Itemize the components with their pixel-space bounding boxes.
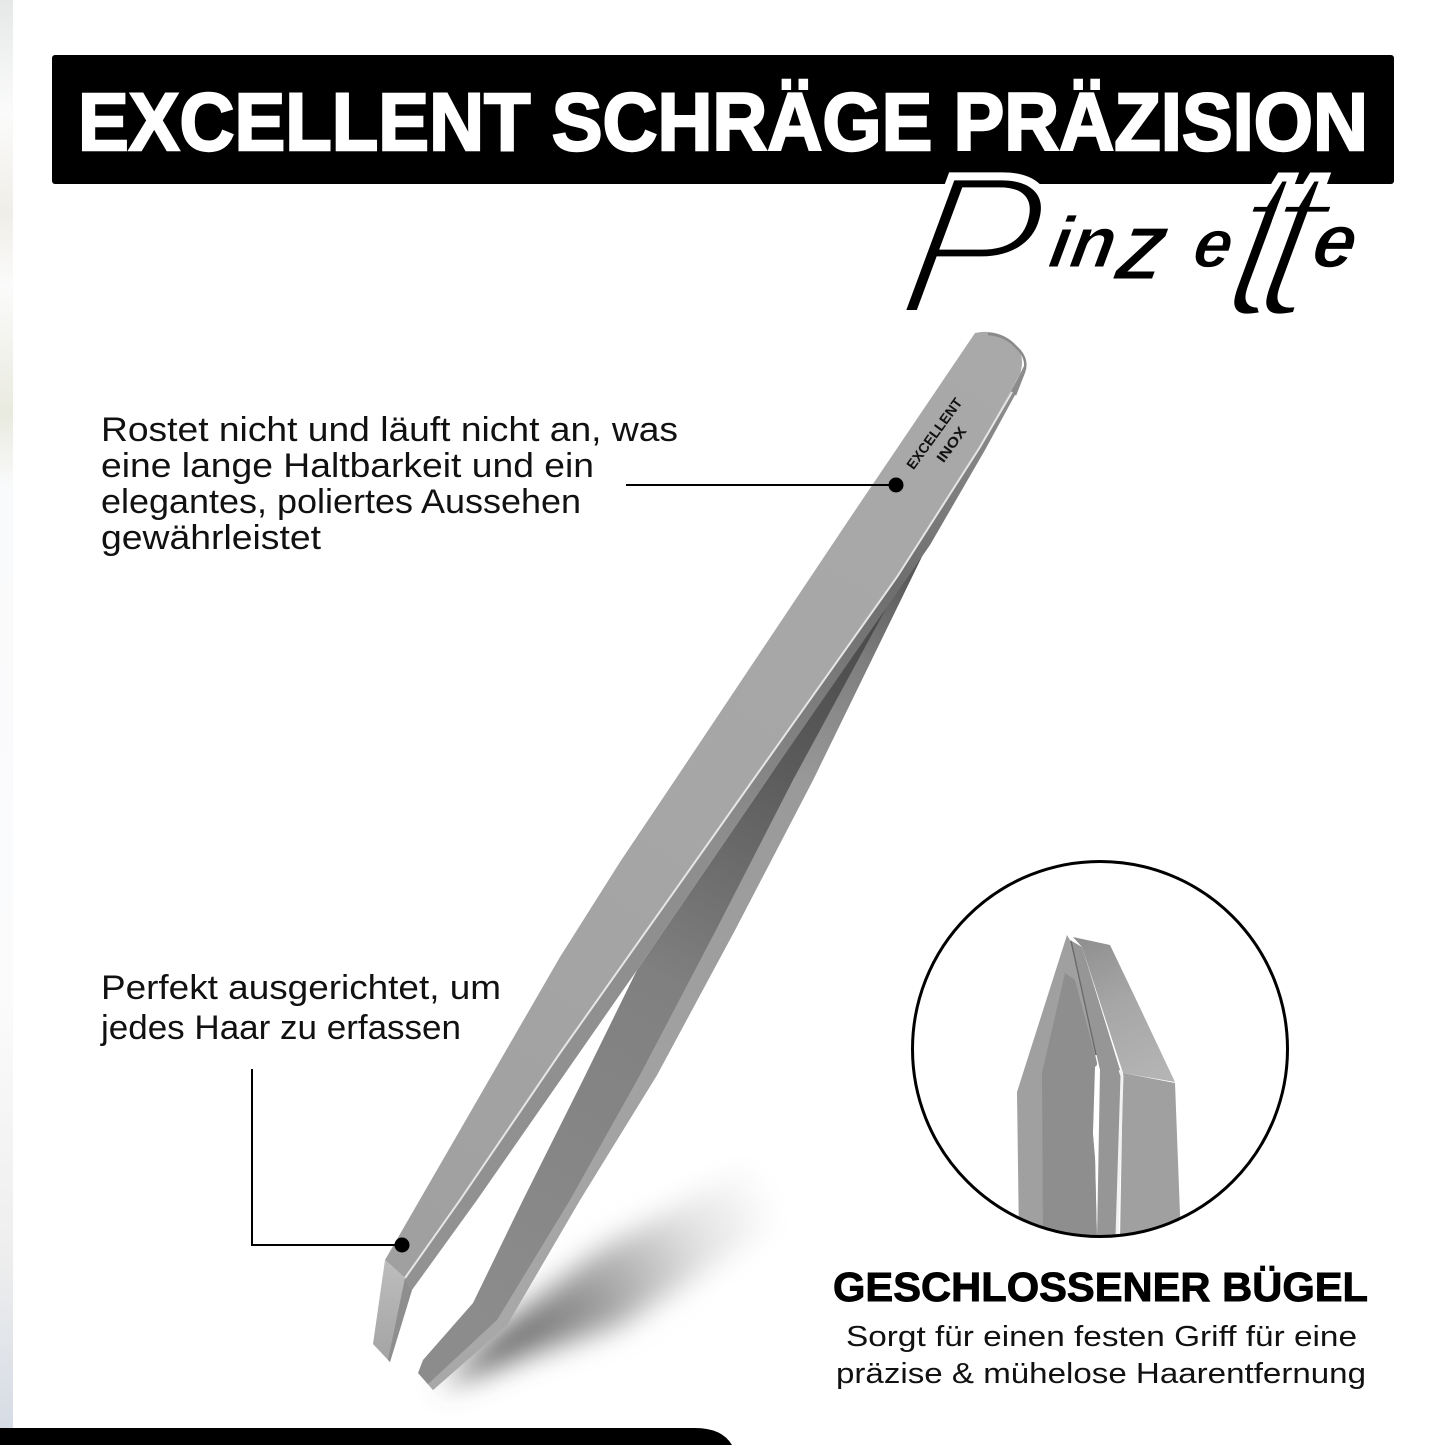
script subtitle: P <box>887 133 1060 357</box>
engraving: brand: EXCELLENT <box>903 394 966 472</box>
detail circle: closed tip <box>912 862 1288 1240</box>
gap <box>1093 1065 1097 1156</box>
callout text: Perfekt ausgerichtet, um <box>101 969 501 1007</box>
front tip <box>373 1260 412 1362</box>
callout text <box>101 411 678 557</box>
bottom black tab <box>0 1428 732 1445</box>
feature description <box>836 1321 1366 1390</box>
leader dot <box>394 1238 410 1252</box>
feature description: präzise & mühelose Haarentfernung <box>836 1358 1366 1390</box>
script subtitle: i <box>1044 202 1080 283</box>
circle outline <box>912 862 1288 1236</box>
callout text <box>100 969 501 1047</box>
callout: rust resistant <box>101 411 904 557</box>
bright edge <box>1117 1070 1122 1236</box>
tweezer shadow <box>440 1160 775 1388</box>
back arm inner <box>1042 973 1097 1240</box>
bevel strip <box>1070 940 1121 1240</box>
callout text: gewährleistet <box>101 519 322 557</box>
callout: alignment <box>100 969 501 1252</box>
back arm <box>418 540 930 1390</box>
script subtitle: e <box>1188 205 1240 282</box>
script subtitle: z <box>1107 191 1177 302</box>
callout text: Rostet nicht und läuft nicht an, was <box>101 411 678 449</box>
feature description: Sorgt für einen festen Griff für eine <box>846 1321 1357 1353</box>
front body <box>1120 1073 1181 1240</box>
front arm bright edge <box>405 392 1012 1278</box>
feature heading: GESCHLOSSENER BÜGEL <box>833 1264 1368 1310</box>
top face <box>1073 937 1175 1082</box>
background edge strip <box>0 0 13 1428</box>
callout text: eine lange Haltbarkeit und ein <box>101 447 594 485</box>
leader dot <box>888 478 904 492</box>
back arm bevel strip <box>428 540 930 1390</box>
back arm outer <box>1017 935 1097 1240</box>
title: EXCELLENT SCHRÄGE PRÄZISION <box>78 77 1368 168</box>
callout text: jedes Haar zu erfassen <box>100 1009 461 1047</box>
front arm lower bevel <box>405 362 1026 1290</box>
script subtitle: e <box>1307 200 1364 284</box>
tweezer illustration <box>373 332 1026 1390</box>
leader line <box>626 484 896 486</box>
callout text: elegantes, poliertes Aussehen <box>101 483 581 521</box>
front arm face <box>385 332 1022 1278</box>
script subtitle: n <box>1065 202 1123 283</box>
script subtitle: t <box>1209 122 1319 362</box>
rounded end highlight <box>988 334 1025 395</box>
leader line <box>252 1069 402 1245</box>
script subtitle: t <box>1241 122 1351 362</box>
engraving: brand: INOX <box>933 423 970 465</box>
title banner <box>52 55 1394 184</box>
